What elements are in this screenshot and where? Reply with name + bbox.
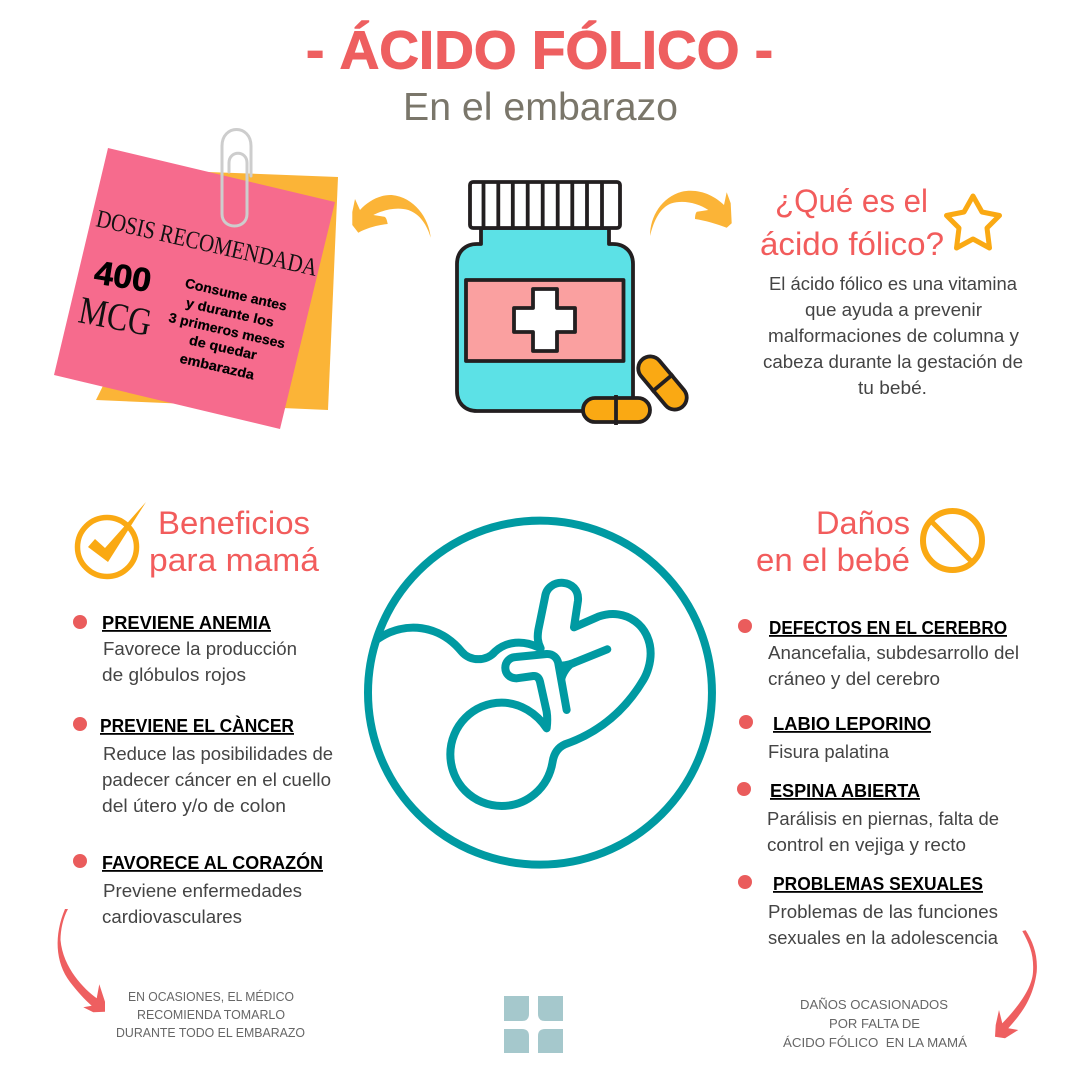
footnote: right: DAÑOS OCASIONADOS <box>800 997 948 1012</box>
dose note: 3 primeros meses <box>167 310 287 351</box>
item: spina bifida: control en vejiga y recto <box>767 834 966 855</box>
horizontal capsule <box>583 395 650 425</box>
bottle cap <box>470 182 620 228</box>
item: sexual problems: PROBLEMAS SEXUALES <box>773 874 983 894</box>
item: brain: Anancefalia, subdesarrollo del <box>768 642 1019 663</box>
item: anemia: de glóbulos rojos <box>102 664 246 685</box>
arrow: right yellow arrow <box>650 191 732 236</box>
item: brain: DEFECTOS EN EL CEREBRO <box>769 618 1007 638</box>
item: cleft lip: Fisura palatina <box>768 741 890 762</box>
text block: definition <box>763 273 1023 398</box>
list: damage to the baby <box>737 618 1019 948</box>
item: cleft lip: LABIO LEPORINO <box>773 714 931 734</box>
footnote: right <box>783 997 967 1050</box>
item: anemia: Favorece la producción <box>103 638 297 659</box>
dose note: embarazda <box>178 351 256 383</box>
panel: sticky notes with recommended dose <box>54 130 338 429</box>
item: cancer <box>73 715 333 816</box>
item: brain: cráneo y del cerebro <box>768 668 940 689</box>
arrow: left red arrow <box>58 909 105 1012</box>
heading: what is folic acid: ácido fólico? <box>760 226 944 262</box>
icon: fetus in circle <box>368 521 712 865</box>
item: sexual problems <box>738 874 999 948</box>
item: spina bifida <box>737 781 999 855</box>
icon: prohibited sign <box>923 511 982 570</box>
text block: definition: malformaciones de columna y <box>768 325 1020 346</box>
item: brain <box>738 618 1019 689</box>
heading: benefits: para mamá <box>149 542 319 578</box>
item: sexual problems: Problemas de las funciones <box>768 901 998 922</box>
footnote: left: EN OCASIONES, EL MÉDICO <box>128 989 294 1004</box>
arrow: right red arrow <box>995 930 1037 1038</box>
heading: benefits: Beneficios <box>158 505 310 541</box>
heading: damage <box>756 505 910 578</box>
text block: definition: tu bebé. <box>858 377 927 398</box>
item: anemia: PREVIENE ANEMIA <box>102 613 271 633</box>
item: cancer: Reduce las posibilidades de <box>103 743 333 764</box>
item: cancer: PREVIENE EL CÀNCER <box>100 715 294 736</box>
text block: definition: El ácido fólico es una vitamina <box>769 273 1018 294</box>
arrow: left yellow arrow <box>352 195 431 238</box>
icon: star <box>946 196 1000 248</box>
bottle body <box>457 228 633 411</box>
footnote: left <box>116 989 305 1040</box>
item: cancer: padecer cáncer en el cuello <box>102 769 331 790</box>
footnote: left: DURANTE TODO EL EMBARAZO <box>116 1025 305 1040</box>
yellow back note <box>96 172 338 410</box>
subtitle: En el embarazo <box>403 86 678 129</box>
icon: check mark in circle <box>78 502 146 576</box>
item: sexual problems: sexuales en la adolescencia <box>768 927 999 948</box>
dose heading: DOSIS RECOMENDADA <box>94 206 320 282</box>
item: heart: cardiovasculares <box>102 906 242 927</box>
icon: medicine bottle <box>457 182 693 425</box>
pink front note <box>54 148 335 429</box>
title: - ÁCIDO FÓLICO - <box>306 20 773 80</box>
footnote: left: RECOMIENDA TOMARLO <box>137 1007 285 1022</box>
text block: definition: que ayuda a prevenir <box>805 299 982 320</box>
bottle label <box>466 280 624 361</box>
item: anemia <box>73 613 297 685</box>
tilted capsule <box>632 350 693 416</box>
item: heart: FAVORECE AL CORAZÓN <box>102 852 323 873</box>
item: cancer: del útero y/o de colon <box>102 795 286 816</box>
item: spina bifida: Parálisis en piernas, falta de <box>767 808 999 829</box>
heading: benefits <box>149 505 319 578</box>
dose note: de quedar <box>188 333 259 363</box>
heading: damage: Daños <box>816 505 910 541</box>
text block: definition: cabeza durante la gestación de <box>763 351 1023 372</box>
footnote: right: POR FALTA DE <box>829 1016 920 1031</box>
dose unit: MCG <box>75 289 155 345</box>
dose note <box>167 276 288 383</box>
dose note: y durante los <box>184 295 276 330</box>
item: spina bifida: ESPINA ABIERTA <box>770 781 920 801</box>
icon: logo squares <box>504 996 563 1053</box>
heading: what is folic acid <box>760 183 944 262</box>
footnote: right: ÁCIDO FÓLICO EN LA MAMÁ <box>783 1035 967 1050</box>
dose number: 400 <box>92 253 154 299</box>
heading: damage: en el bebé <box>756 542 910 578</box>
icon: paperclip <box>222 130 251 226</box>
heading: what is folic acid: ¿Qué es el <box>775 183 928 219</box>
item: heart <box>73 852 323 927</box>
cross <box>514 289 575 351</box>
item: cleft lip <box>739 714 931 762</box>
item: heart: Previene enfermedades <box>103 880 302 901</box>
list: benefits for the mother <box>73 613 333 927</box>
dose note: Consume antes <box>184 276 288 314</box>
